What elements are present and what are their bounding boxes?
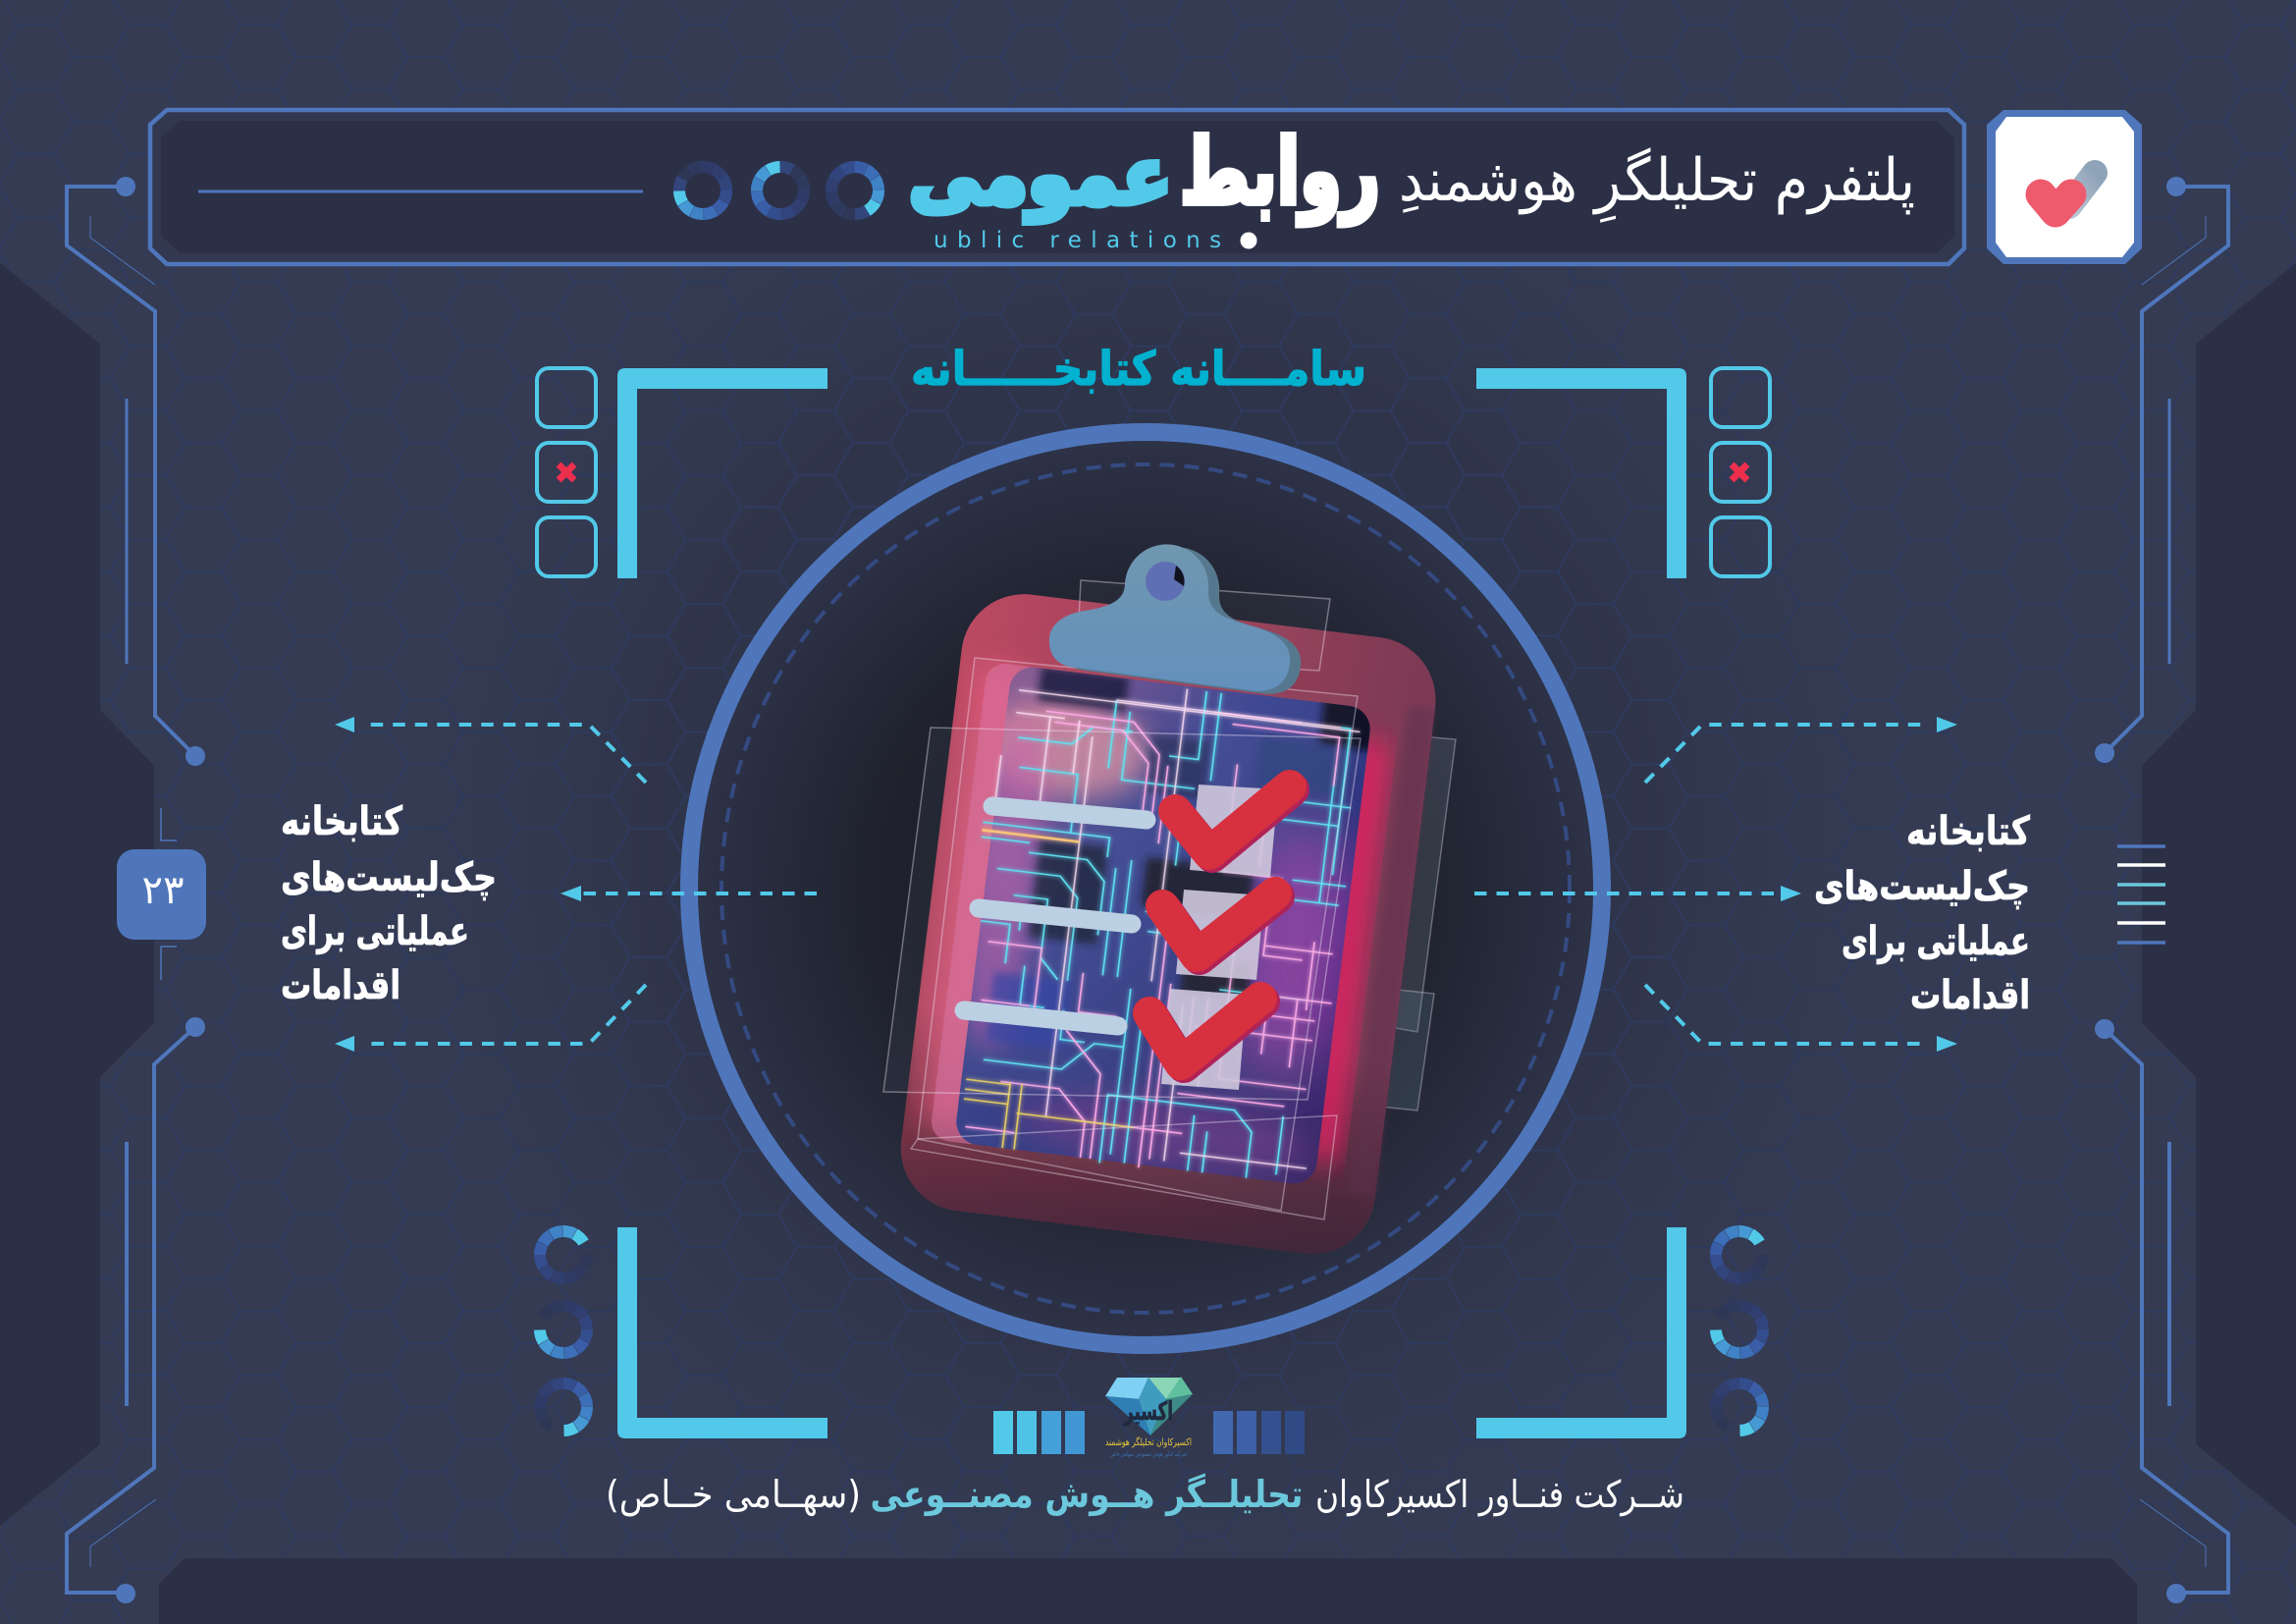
header progress rings bbox=[670, 158, 887, 223]
bracket: bottom right bbox=[1476, 1227, 1686, 1438]
header rule bbox=[198, 190, 643, 192]
side tick lines bbox=[2117, 846, 2165, 943]
glass tint left of screen bbox=[930, 662, 1046, 1146]
left text block bbox=[281, 799, 497, 1008]
left footer bars bbox=[993, 1411, 1085, 1454]
clipboard board bbox=[893, 587, 1443, 1261]
arrow: bottom left bbox=[335, 985, 646, 1052]
clipboard clip bbox=[1049, 544, 1301, 694]
circuit: bottom left bbox=[67, 1017, 205, 1603]
checkboxes: left bbox=[537, 368, 596, 576]
right footer bars bbox=[1213, 1411, 1305, 1454]
company logo bbox=[1105, 1377, 1193, 1458]
logo: public relations: عمومی bbox=[909, 131, 1172, 223]
central circle bbox=[689, 432, 1602, 1345]
company logo: شرکت فناور هوش مصنوعی سهامی خاص bbox=[1110, 1450, 1187, 1458]
page number badge bbox=[117, 808, 206, 980]
logo: public relations bbox=[909, 120, 1380, 253]
right text block: عملیاتی برای bbox=[1842, 919, 2030, 964]
circuit screen bbox=[956, 668, 1370, 1184]
logo: public relations: ublic relations bbox=[934, 228, 1231, 253]
arrow: bottom right bbox=[1645, 985, 1957, 1052]
right text block: اقدامات bbox=[1910, 973, 2030, 1018]
glass sheets bbox=[883, 580, 1361, 1219]
header title: پلتفرم تحلیلگرِ هوشمندِ bbox=[1399, 146, 1915, 224]
left text block: کتابخانه bbox=[281, 799, 403, 844]
left text block: چک‌لیست‌های bbox=[281, 855, 497, 900]
logo: public relations: روابط bbox=[1180, 120, 1380, 226]
footer company name bbox=[606, 1473, 1684, 1517]
circuit: top right bbox=[2095, 177, 2228, 763]
arrow: middle left bbox=[561, 886, 817, 901]
clipboard back sheets bbox=[1370, 736, 1456, 1110]
page number badge: ۲۳ bbox=[142, 868, 184, 913]
bracket: top right bbox=[1476, 368, 1686, 578]
progress rings: bottom right bbox=[1707, 1222, 1772, 1439]
red check marks bbox=[1149, 786, 1293, 1066]
bracket: top left bbox=[617, 368, 828, 578]
arrow: top right bbox=[1645, 717, 1957, 783]
footer company name: تحلیلــگر هــوش مصنــوعی bbox=[870, 1473, 1304, 1516]
footer company name: (سهــامی خــاص) bbox=[606, 1473, 861, 1517]
arrow: top left bbox=[335, 717, 646, 783]
right text block bbox=[1814, 809, 2031, 1018]
right text block: کتابخانه bbox=[1906, 809, 2031, 854]
clipboard illustration bbox=[883, 544, 1456, 1261]
arrow: middle right bbox=[1474, 886, 1801, 901]
header banner bbox=[150, 110, 1964, 264]
company logo: اکسیر bbox=[1123, 1397, 1173, 1427]
company logo: اکسیرکاوان تحلیلگر هوشمند bbox=[1105, 1436, 1192, 1448]
header frame bbox=[150, 110, 1964, 264]
board glow bbox=[1308, 739, 1388, 1163]
bracket: bottom left bbox=[617, 1227, 828, 1438]
circuit traces bbox=[962, 687, 1362, 1180]
note squares bbox=[1161, 785, 1278, 1090]
right text block: چک‌لیست‌های bbox=[1814, 864, 2030, 909]
circuit: bottom right bbox=[2095, 1019, 2228, 1603]
section title: سامــــانه کتابخــــــانه bbox=[911, 342, 1366, 397]
left text block: عملیاتی برای bbox=[281, 909, 469, 954]
checkboxes: right bbox=[1711, 368, 1770, 576]
progress rings: bottom left bbox=[531, 1222, 596, 1439]
circuit: top left bbox=[67, 177, 205, 766]
icon: heart check bbox=[1987, 110, 2142, 264]
footer company name: شــرکت فنــاور اکسیرکاوان bbox=[1315, 1473, 1684, 1517]
left text block: اقدامات bbox=[281, 963, 400, 1008]
list bars bbox=[964, 806, 1147, 1026]
checklist rows bbox=[964, 785, 1293, 1090]
header inner panel bbox=[161, 121, 1954, 253]
